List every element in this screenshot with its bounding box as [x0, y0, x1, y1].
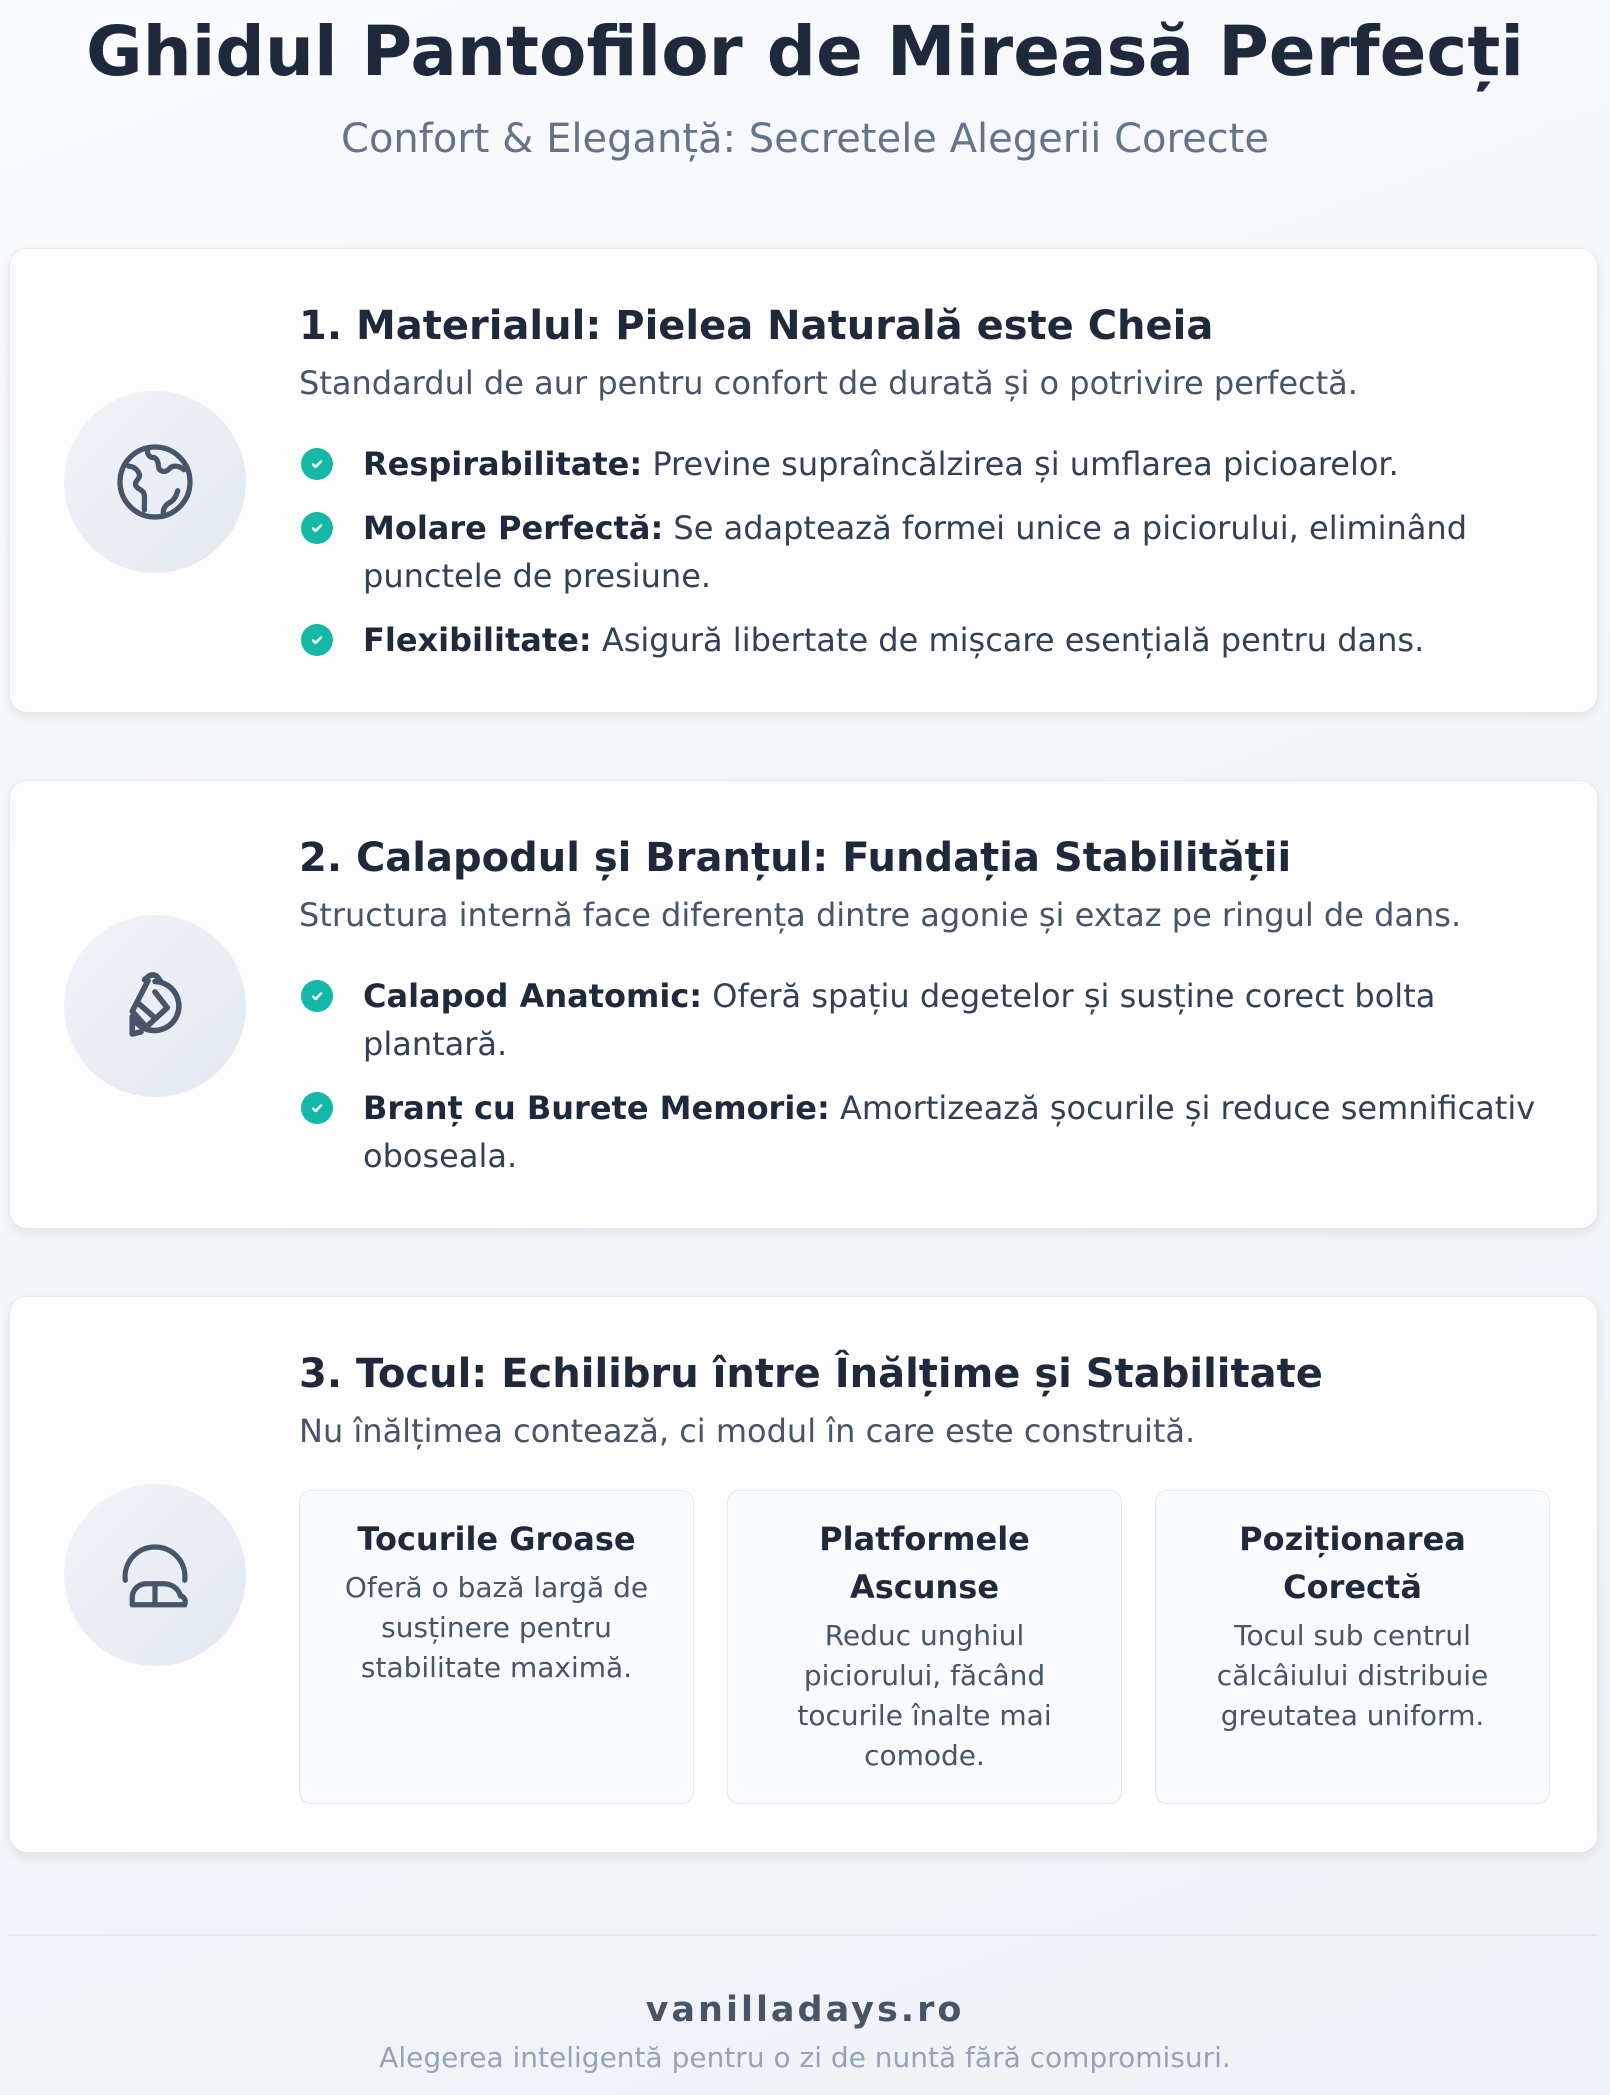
title: Ghidul Pantofilor de Mireasă Perfecți — [86, 12, 1524, 92]
subcard: thick heels: Tocurile Groase — [357, 1520, 636, 1558]
icon: shoe last — [64, 915, 246, 1097]
heading: 2. Calapodul și Branțul: Fundația Stabilității — [299, 835, 1291, 881]
subcard: positioning: Poziționarea Corectă — [1239, 1520, 1466, 1606]
subcard: hidden platforms: Reduc unghiul piciorului, făcând tocurile înalte mai comode. — [797, 1619, 1052, 1772]
subcard: thick heels: Oferă o bază largă de susținere pentru stabilitate maximă. — [345, 1571, 648, 1684]
footer tagline: Alegerea inteligentă pentru o zi de nuntă fără compromisuri. — [379, 2041, 1231, 2074]
description: Standardul de aur pentru confort de durată și o potrivire perfectă. — [299, 364, 1358, 402]
subcard: hidden platforms — [727, 1490, 1122, 1804]
subtitle: Confort & Eleganță: Secretele Alegerii Corecte — [341, 116, 1269, 162]
bullet: Branț cu Burete Memorie: Amortizează șocurile și reduce semnificativ oboseala. — [363, 1089, 1535, 1175]
subcard: hidden platforms: Platformele Ascunse — [819, 1520, 1030, 1606]
subcard: thick heels — [299, 1490, 694, 1804]
footer brand: vanilladays.ro — [646, 1990, 964, 2030]
bullet: Flexibilitate: Asigură libertate de mișcare esențială pentru dans. — [363, 621, 1424, 659]
icon: heel — [64, 1484, 246, 1666]
subcard: positioning: Tocul sub centrul călcâiului distribuie greutatea uniform. — [1217, 1619, 1488, 1732]
panel: last and insole — [9, 780, 1598, 1229]
icon: globe — [64, 391, 246, 573]
heading: 3. Tocul: Echilibru între Înălțime și Stabilitate — [299, 1351, 1323, 1397]
panel: material — [9, 248, 1598, 713]
panel: heel — [9, 1296, 1598, 1853]
description: Structura internă face diferența dintre agonie și extaz pe ringul de dans. — [299, 896, 1461, 934]
bullet: Respirabilitate: Previne supraîncălzirea și umflarea picioarelor. — [363, 445, 1399, 483]
description: Nu înălțimea contează, ci modul în care este construită. — [299, 1412, 1195, 1450]
subcard: positioning — [1155, 1490, 1550, 1804]
bullet: Calapod Anatomic: Oferă spațiu degetelor și susține corect bolta plantară. — [363, 977, 1435, 1063]
bullet: Molare Perfectă: Se adaptează formei unice a piciorului, eliminând punctele de presiune. — [363, 509, 1467, 595]
heading: 1. Materialul: Pielea Naturală este Cheia — [299, 303, 1213, 349]
